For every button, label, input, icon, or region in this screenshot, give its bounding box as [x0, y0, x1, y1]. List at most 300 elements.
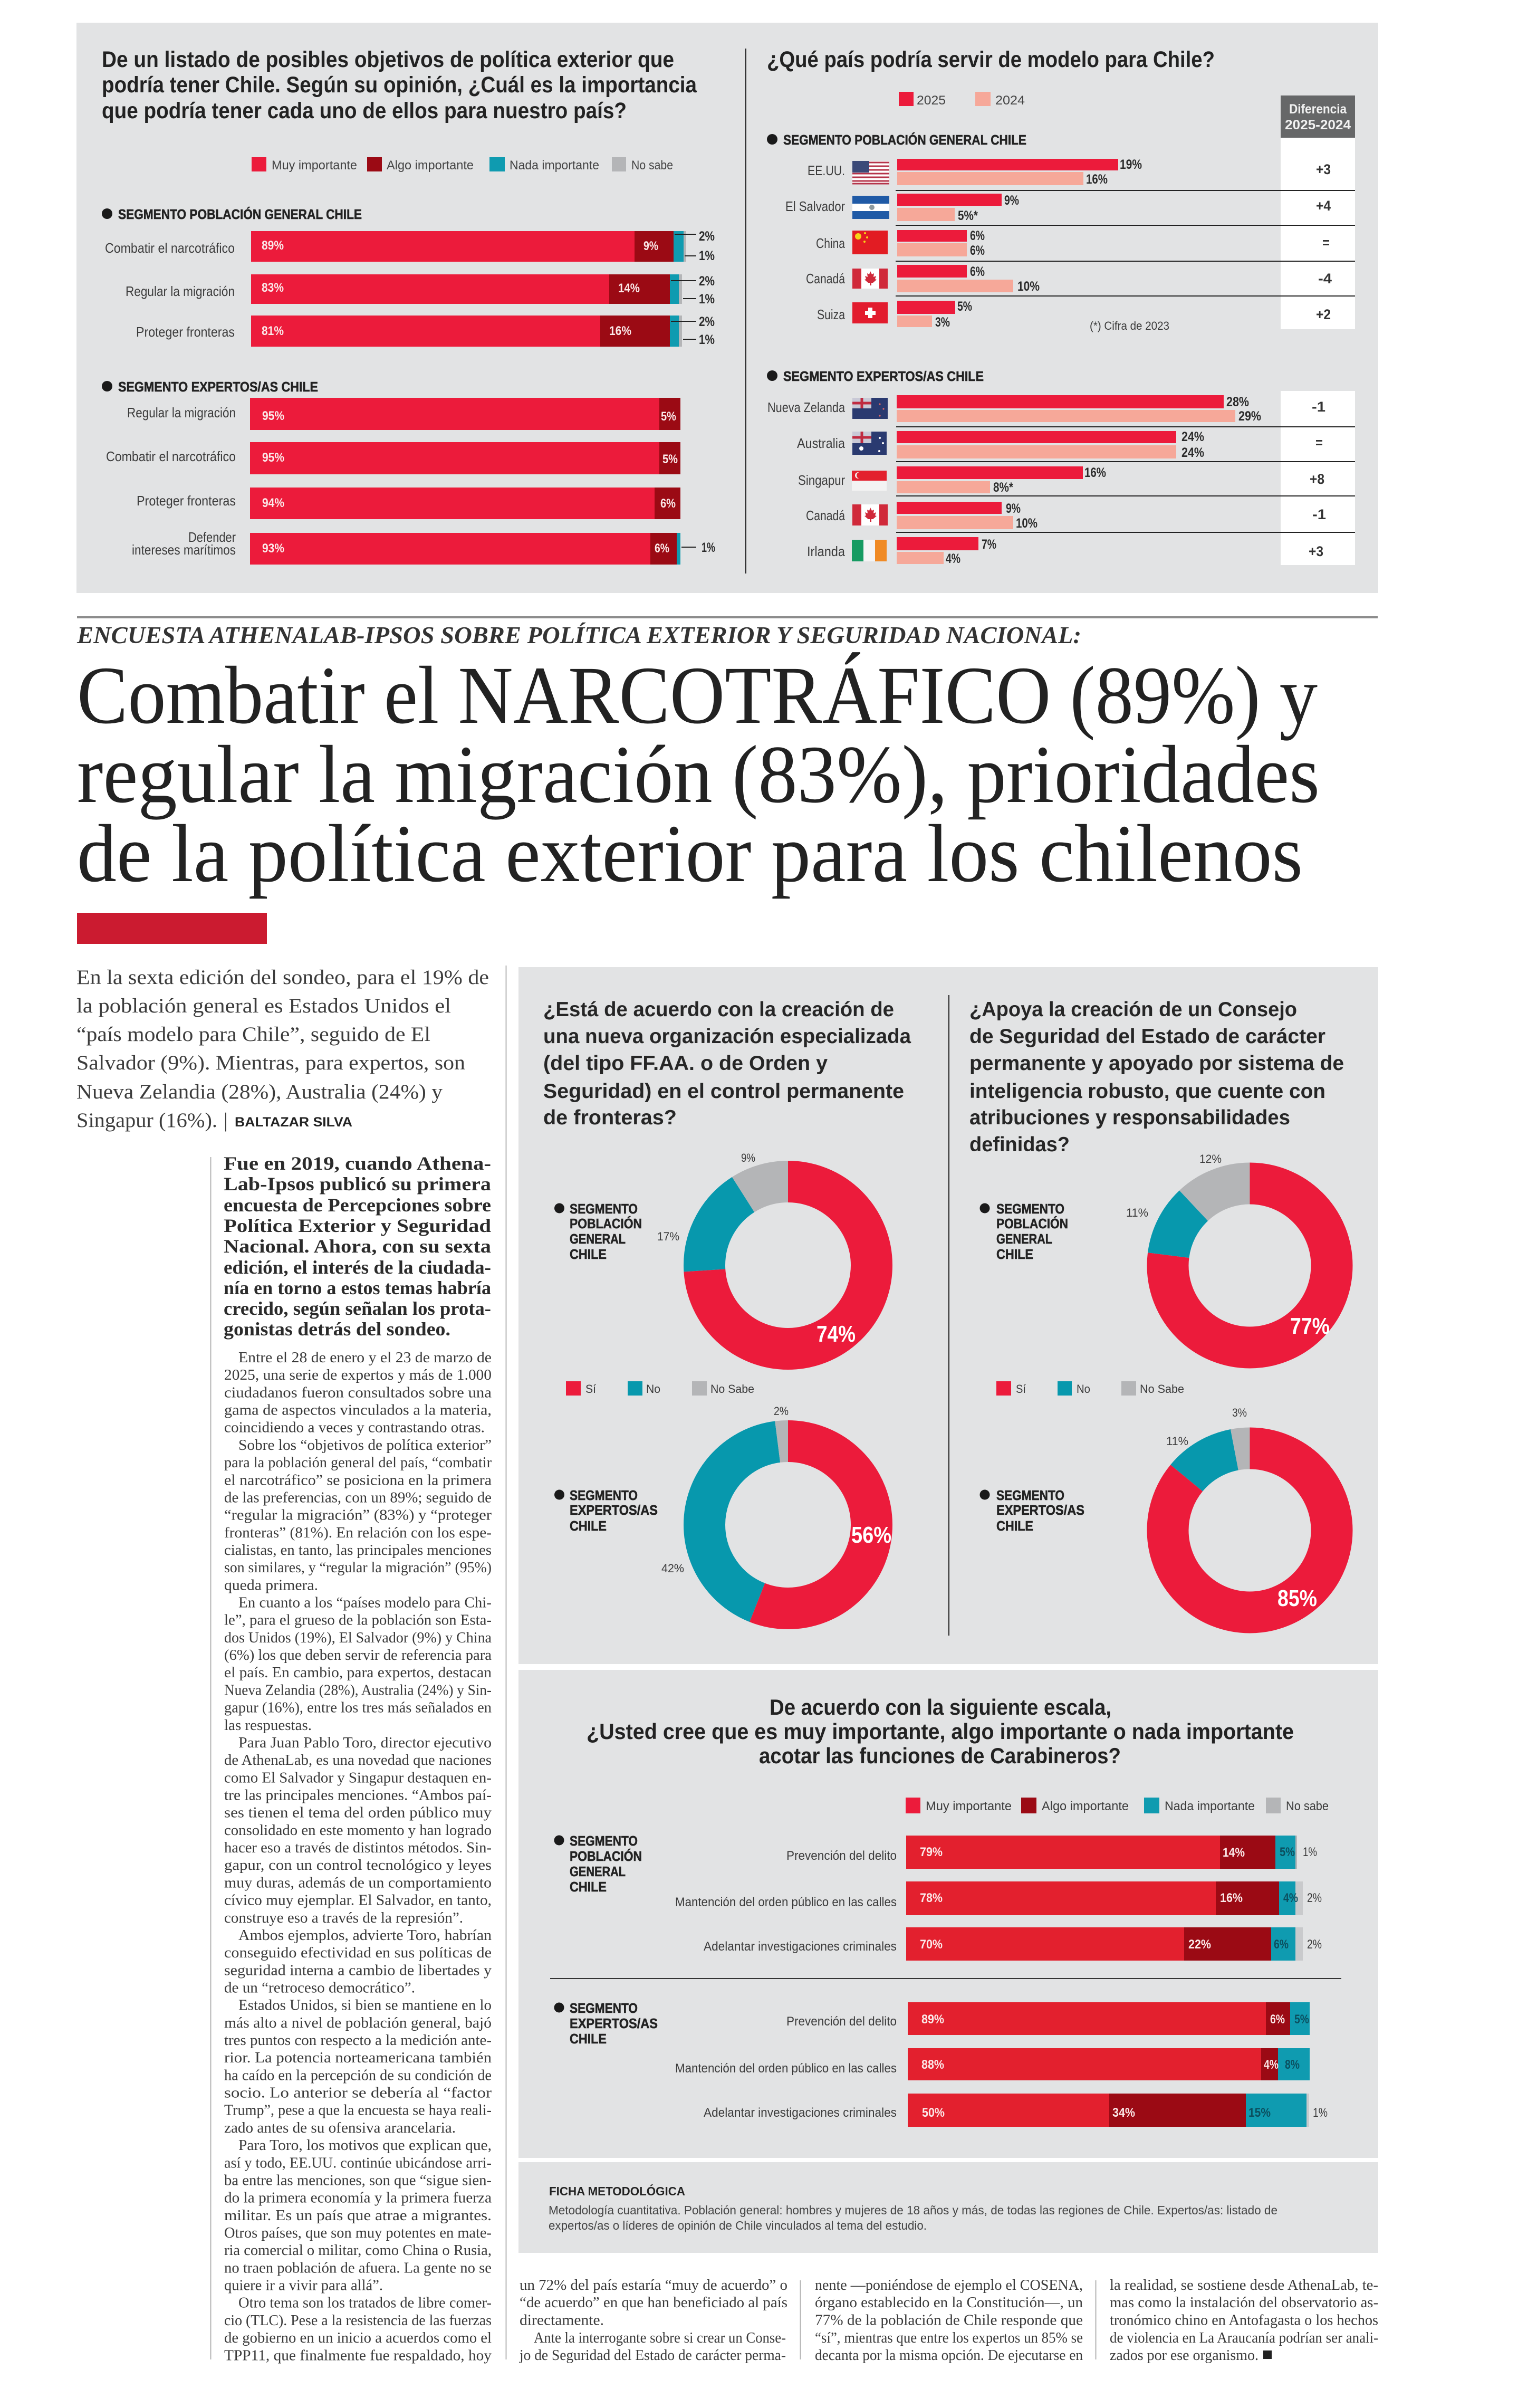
segment label: CHILE — [570, 1879, 607, 1895]
panel: funciones de Carabineros — [518, 1670, 1378, 2158]
bar: combatir el narcotráfico 89%: 2% — [699, 229, 715, 244]
segment label — [554, 1487, 658, 1534]
bar: mantención del orden público 88%: 88% — [921, 2058, 944, 2072]
donut: fronteras, población general: 17% — [657, 1230, 679, 1243]
red block — [77, 913, 267, 944]
segment label: GENERAL — [996, 1231, 1052, 1247]
article body column: fronteras” (81%). En relación con los espe- — [224, 1525, 492, 1541]
bar: adelantar investigaciones 70%: 70% — [920, 1937, 943, 1952]
row: China: 6% — [970, 228, 985, 243]
icon: flag Canada — [852, 269, 888, 289]
panel: donut charts — [518, 967, 1378, 1664]
article body column: el país. En cambio, para expertos, destacan — [224, 1665, 492, 1681]
article body column: dos Unidos (19%), El Salvador (9%) y China — [224, 1630, 492, 1646]
article body column: cialistas, en tanto, las principales menciones — [224, 1542, 492, 1559]
intro text: En la sexta edición del sondeo, para el 19% de — [76, 966, 489, 989]
article body column: consolidado en este momento y han logrado — [224, 1822, 492, 1839]
bar: regular la migración 83%: 83% — [262, 281, 284, 295]
row: El Salvador — [785, 193, 1331, 223]
row: Australia — [797, 429, 1323, 460]
lede paragraph: Fue en 2019, cuando Athena- — [224, 1153, 491, 1174]
bar: proteger fronteras 94%: Proteger fronteras — [137, 493, 236, 509]
legend: 2025 y 2024: 2025 — [917, 93, 946, 108]
article body column: Otros países, que son muy potentes en mate- — [224, 2225, 492, 2241]
row: EE.UU.: +3 — [1316, 161, 1331, 177]
row: Australia: 24% — [1181, 445, 1204, 460]
segment label: CHILE — [570, 1246, 607, 1262]
icon: flag USA — [852, 161, 889, 184]
donut: consejo, población general: 11% — [1126, 1206, 1148, 1219]
donut: fronteras, expertos: 42% — [661, 1562, 684, 1575]
bar: proteger fronteras 94%: 94% — [262, 496, 284, 510]
row: Singapur — [798, 465, 1324, 495]
row: Irlanda: 7% — [982, 537, 996, 552]
row: Suiza: 5% — [957, 299, 972, 314]
icon: flag Canada — [852, 504, 888, 525]
icon: flag Australia — [852, 432, 887, 455]
bar: adelantar investigaciones 70%: 6% — [1274, 1937, 1289, 1952]
row: China — [816, 228, 1330, 258]
bar: adelantar investigaciones 70% — [704, 1927, 1322, 1961]
bar: mantención del orden público 78%: 4% — [1283, 1891, 1298, 1905]
bar: regular la migración 83%: 2% — [699, 274, 715, 289]
row: Irlanda: +3 — [1309, 543, 1323, 559]
segment label — [980, 1201, 1068, 1262]
heading: consejo de seguridad: definidas? — [969, 1133, 1070, 1156]
lede paragraph: Lab-Ipsos publicó su primera — [224, 1173, 491, 1195]
article body column: TPP11, que finalmente fue respaldado, hoy — [224, 2347, 492, 2364]
row: Nueva Zelanda: 28% — [1226, 395, 1249, 409]
segment label: SEGMENTO — [570, 1833, 638, 1849]
row: Nueva Zelanda: 29% — [1238, 409, 1261, 424]
bar: prevención del delito 89%: 6% — [1270, 2012, 1285, 2027]
bar: adelantar investigaciones 50% — [704, 2094, 1328, 2127]
segment label: POBLACIÓN — [570, 1216, 642, 1231]
bar: proteger fronteras 81%: 81% — [262, 324, 284, 338]
bar: proteger fronteras 94% — [137, 488, 680, 519]
article body column: zado antes de su ofensiva arancelaria. — [224, 2120, 456, 2136]
segment label — [554, 1833, 642, 1895]
legend: importancia: No sabe — [631, 158, 673, 173]
headline: Combatir el NARCOTRÁFICO (89%) y — [77, 649, 1318, 741]
row: Canadá: Canadá — [806, 271, 845, 286]
row: Canadá: 6% — [970, 264, 985, 279]
segment label: SEGMENTO — [996, 1487, 1064, 1503]
legend: sí, no, no sabe: No — [646, 1382, 660, 1396]
article body column: Estados Unidos, si bien se mantiene en lo — [238, 1998, 492, 2014]
article body column: ses tienen el tema del orden público muy — [224, 1805, 492, 1821]
headline: de la política exterior para los chilenos — [77, 808, 1303, 899]
panel: ficha metodológica — [518, 2162, 1378, 2253]
legend: sí, no, no sabe: No Sabe — [710, 1382, 754, 1396]
bar: mantención del orden público 78%: Mantención del orden público en las calles — [675, 1895, 897, 1909]
article column 3: 77% de la población de Chile responde que — [815, 2312, 1083, 2329]
article body column: Trump”, pese a que la encuesta se haya reali- — [224, 2103, 492, 2119]
article body column: Para Toro, los motivos que explican que, — [238, 2137, 492, 2154]
article body column: do la primera economía y la primera fuerza — [224, 2190, 492, 2206]
article body column: quiere ir a vivir para allá”. — [224, 2277, 383, 2294]
headline — [77, 649, 1320, 899]
row: Suiza: 3% — [935, 315, 950, 330]
bar: proteger fronteras 81%: 1% — [699, 332, 715, 347]
heading: organización de fronteras: de fronteras? — [543, 1106, 677, 1129]
bar: defender intereses marítimos 93%: 6% — [655, 541, 669, 556]
row: Singapur: Singapur — [798, 472, 845, 488]
row: Canadá expertos: Canadá — [806, 508, 845, 523]
bar: combatir el narcotráfico 95% — [106, 442, 680, 474]
bar: combatir el narcotráfico 89%: 89% — [262, 238, 284, 253]
article body column: las respuestas. — [224, 1717, 312, 1734]
bar: defender intereses marítimos 93% — [132, 529, 715, 565]
row: Suiza: Suiza — [817, 307, 845, 322]
bar: adelantar investigaciones 50%: 1% — [1313, 2106, 1328, 2120]
segment label: población general: SEGMENTO POBLACIÓN GENERAL CHILE — [783, 132, 1026, 148]
article body column: Otro tema son los tratados de libre comer- — [238, 2295, 492, 2311]
article column 4: zados por ese organismo. — [1110, 2347, 1259, 2364]
article body column: de AthenaLab, es una novedad que naciones — [224, 1752, 492, 1769]
end mark — [1263, 2350, 1272, 2359]
article body column: ha caído en la percepción de su condición de — [224, 2067, 492, 2084]
lede paragraph: nía en torno a estos temas habría — [224, 1277, 491, 1298]
heading: consejo de seguridad: ¿Apoya la creación de un Consejo — [969, 998, 1297, 1021]
bar: adelantar investigaciones 70%: 2% — [1307, 1937, 1322, 1952]
row: Canadá expertos — [806, 501, 1326, 531]
intro text: la población general es Estados Unidos el — [76, 995, 451, 1017]
intro text: “país modelo para Chile”, seguido de El — [76, 1023, 430, 1046]
column header: diferencia — [1281, 95, 1355, 138]
article body column: militar. Es un país que atrae a migrantes. — [224, 2208, 492, 2224]
article body column: En cuanto a los “países modelo para Chi- — [238, 1594, 492, 1611]
heading: organización de fronteras: una nueva organización especializada — [543, 1025, 911, 1048]
legend: sí, no, no sabe: Sí — [585, 1382, 596, 1396]
bar: prevención del delito 79%: 79% — [920, 1845, 943, 1859]
row: Canadá expertos: 10% — [1016, 516, 1038, 531]
row: El Salvador: El Salvador — [785, 198, 845, 214]
heading: objetivos de política exterior — [102, 47, 697, 123]
bar: combatir el narcotráfico 89% — [105, 229, 715, 263]
bar: mantención del orden público 88%: 4% — [1264, 2058, 1279, 2072]
donut: fronteras, expertos — [554, 1404, 891, 1608]
row: Canadá expertos: 9% — [1006, 501, 1021, 516]
segment label: CHILE — [570, 1518, 607, 1534]
bar: regular la migración 95% — [127, 398, 680, 430]
icon: flag China — [852, 231, 888, 254]
article body column: de gobierno en un inicio a acuerdos como el — [224, 2330, 492, 2346]
icon: flag Ireland — [852, 540, 887, 561]
chart: carabineros, expertos — [554, 2000, 1328, 2127]
bar: prevención del delito 79%: Prevención del delito — [786, 1849, 897, 1863]
segment label: EXPERTOS/AS — [570, 1502, 658, 1518]
lede paragraph: gonistas detrás del sondeo. — [224, 1318, 450, 1340]
bar: regular la migración 95%: Regular la migración — [127, 405, 236, 421]
donut: consejo, población general: 12% — [1199, 1152, 1222, 1165]
bar: combatir el narcotráfico 95%: Combatir el narcotráfico — [106, 448, 236, 464]
heading: consejo de seguridad: inteligencia robusto, que cuente con — [969, 1080, 1325, 1103]
row: Irlanda — [807, 537, 1323, 566]
bar: combatir el narcotráfico 89%: Combatir el narcotráfico — [105, 240, 235, 256]
row: Singapur: +8 — [1310, 471, 1324, 487]
bar: mantención del orden público 78%: 78% — [920, 1891, 943, 1905]
heading: organización de fronteras: (del tipo FF.AA. o de Orden y — [543, 1052, 828, 1075]
heading: organización de fronteras — [543, 998, 911, 1129]
segment label: POBLACIÓN — [570, 1848, 642, 1864]
donut: consejo, expertos — [980, 1406, 1332, 1612]
row: Singapur: 8%* — [993, 480, 1013, 495]
article body column: el narcotráfico” se posiciona en la primera — [224, 1472, 492, 1488]
legend: 2025 y 2024 — [899, 92, 1025, 108]
bar: proteger fronteras 81%: 16% — [609, 324, 631, 338]
heading: objetivos de política exterior: De un listado de posibles objetivos de política exterior que — [102, 47, 674, 72]
bar: adelantar investigaciones 70%: Adelantar investigaciones criminales — [704, 1939, 897, 1954]
bar: prevención del delito 89%: 89% — [921, 2012, 944, 2027]
article body column: gapur, con un control tecnológico y leyes — [224, 1857, 492, 1874]
segment label — [554, 1201, 642, 1262]
row: Nueva Zelanda: -1 — [1312, 399, 1325, 415]
segment label — [980, 1487, 1084, 1534]
ficha heading: FICHA METODOLÓGICA — [549, 2184, 685, 2198]
bar: adelantar investigaciones 70%: 22% — [1188, 1937, 1211, 1952]
bar: mantención del orden público 88% — [675, 2048, 1310, 2080]
icon: flag Switzerland — [852, 302, 888, 323]
ficha text: Metodología cuantitativa. Población general: hombres y mujeres de 18 años y más, de todas las regiones de Chile. Expertos/as: listado de — [549, 2203, 1277, 2217]
row: Suiza — [817, 299, 1331, 330]
row: China: 6% — [970, 243, 985, 258]
article body column: construye eso a través de la represión”. — [224, 1910, 463, 1926]
legend: importancia — [906, 1798, 1329, 1813]
article body column: (6%) los que deben servir de referencia para — [224, 1647, 492, 1664]
article body column: seguridad interna a cambio de libertades y — [224, 1962, 492, 1979]
row: El Salvador: +4 — [1316, 198, 1331, 214]
bar: proteger fronteras 81% — [136, 314, 715, 347]
article body column: conseguido efectividad en sus políticas de — [224, 1945, 492, 1961]
row: Nueva Zelanda — [767, 395, 1325, 424]
byline: BALTAZAR SILVA — [235, 1115, 352, 1130]
article column 4: la realidad, se sostiene desde AthenaLab, te- — [1110, 2277, 1378, 2294]
article body column: hacer eso a través de distintos métodos. Sin- — [224, 1840, 492, 1856]
bar: adelantar investigaciones 50%: Adelantar investigaciones criminales — [704, 2106, 897, 2120]
donut: fronteras, expertos: 56% — [851, 1522, 891, 1548]
bar: proteger fronteras 81%: 2% — [699, 314, 715, 329]
row: Canadá: -4 — [1318, 271, 1332, 286]
row: EE.UU. — [808, 157, 1331, 187]
bar: regular la migración 95%: 95% — [262, 409, 284, 423]
segment label: SEGMENTO — [570, 1487, 638, 1503]
divider between donut charts — [948, 995, 949, 1636]
intro text: Nueva Zelandia (28%), Australia (24%) y — [76, 1081, 443, 1103]
segment label: SEGMENTO — [996, 1201, 1064, 1217]
article column 3: órgano establecido en la Constitución—, un — [815, 2295, 1083, 2311]
row: Australia: 24% — [1181, 429, 1204, 444]
donut: consejo, expertos: 85% — [1277, 1585, 1317, 1611]
article column 2: Ante la interrogante sobre si crear un Conse- — [534, 2330, 786, 2346]
row: Australia: Australia — [797, 435, 845, 451]
bar: mantención del orden público 78%: 2% — [1307, 1891, 1322, 1905]
divider rule above kicker — [77, 616, 1378, 618]
donut: fronteras, expertos: 2% — [774, 1404, 789, 1418]
donut: consejo, población general — [980, 1152, 1332, 1348]
article body column: cívico muy ejemplar. El Salvador, en tanto, — [224, 1893, 492, 1909]
article body column: gama de aspectos vinculados a la materia, — [224, 1402, 492, 1418]
donut: consejo, población general: 77% — [1290, 1313, 1330, 1339]
legend: importancia — [252, 157, 673, 173]
ficha text — [549, 2203, 1277, 2232]
heading: objetivos de política exterior: que podría tener cada uno de ellos para nuestro país? — [102, 98, 627, 123]
chart: carabineros, población general — [554, 1833, 1322, 1961]
bar: proteger fronteras 94%: 6% — [660, 496, 676, 511]
heading: carabineros — [587, 1695, 1294, 1768]
row: Irlanda: Irlanda — [807, 543, 845, 559]
bar: defender intereses marítimos 93%: 1% — [702, 540, 715, 555]
lede paragraph: Política Exterior y Seguridad — [224, 1215, 491, 1236]
bar: defender intereses marítimos 93%: intereses marítimos — [132, 542, 236, 558]
heading: carabineros: De acuerdo con la siguiente escala, — [770, 1695, 1111, 1719]
row: EE.UU.: EE.UU. — [808, 163, 845, 178]
article body column: ria comercial o militar, como China o Rusia, — [224, 2242, 492, 2259]
donut: fronteras, población general: 9% — [741, 1151, 755, 1164]
article body column: no traen población de afuera. La gente no se — [224, 2260, 492, 2276]
article body column: Para Juan Pablo Toro, director ejecutivo — [238, 1735, 492, 1751]
article body column: socio. Lo anterior se debería al “factor — [224, 2085, 492, 2101]
bar: regular la migración 83% — [126, 274, 715, 307]
row: China: China — [816, 235, 845, 251]
bar: adelantar investigaciones 50%: 34% — [1112, 2106, 1135, 2120]
heading: consejo de seguridad: de Seguridad del Estado de carácter — [969, 1025, 1325, 1048]
row: Nueva Zelanda: Nueva Zelanda — [767, 399, 845, 415]
segment label: CHILE — [996, 1518, 1033, 1534]
segment label: POBLACIÓN — [996, 1216, 1068, 1231]
bar: combatir el narcotráfico 95%: 5% — [662, 452, 678, 466]
segment label: GENERAL — [570, 1864, 626, 1879]
heading: organización de fronteras: ¿Está de acuerdo con la creación de — [543, 998, 894, 1021]
bar: regular la migración 95%: 5% — [661, 409, 676, 424]
column header: diferencia: Diferencia — [1289, 102, 1347, 117]
legend: sí, no, no sabe — [566, 1381, 754, 1396]
segment label: CHILE — [570, 2031, 607, 2047]
legend: sí, no, no sabe: No Sabe — [1140, 1382, 1184, 1396]
legend: importancia: Nada importante — [510, 158, 599, 173]
icon: flag New Zealand — [852, 398, 888, 419]
article body column: Sobre los “objetivos de política exterior” — [238, 1437, 492, 1454]
bar: prevención del delito 79%: 1% — [1303, 1845, 1317, 1859]
article body column: Nueva Zelandia (28%), Australia (24%) y Sin- — [224, 1682, 492, 1698]
chart: países modelo, población general — [767, 132, 1355, 332]
legend: sí, no, no sabe: No — [1077, 1382, 1090, 1396]
intro text: | — [224, 1109, 228, 1132]
panel: top charts — [76, 23, 1378, 593]
row: China: = — [1322, 235, 1330, 251]
article body column: para la población general del país, “combatir — [224, 1455, 492, 1471]
article body column: 2025, una serie de expertos y más de 1.000 — [224, 1367, 492, 1383]
legend: 2025 y 2024: 2024 — [995, 93, 1025, 108]
article body column: coincidiendo a veces y contrastando otras. — [224, 1420, 485, 1436]
chart: países modelo, expertos — [767, 368, 1355, 566]
article column 2: un 72% del país estaría “muy de acuerdo” o — [520, 2277, 787, 2294]
heading: organización de fronteras: Seguridad) en el control permanente — [543, 1080, 904, 1103]
segment label: expertos: SEGMENTO EXPERTOS/AS CHILE — [783, 368, 984, 384]
article column 3: decanta por la misma opción. De ejecutarse en — [815, 2347, 1083, 2364]
bar: prevención del delito 79%: 14% — [1223, 1846, 1245, 1860]
legend: importancia: Nada importante — [1165, 1799, 1255, 1813]
donut: consejo, expertos: 3% — [1232, 1406, 1247, 1419]
article body column: tre las principales menciones. “Ambos paí- — [224, 1788, 492, 1803]
bar: combatir el narcotráfico 95%: 95% — [262, 451, 284, 465]
article column 2: “de acuerdo” en que han beneficiado al país — [520, 2295, 787, 2311]
footnote: cifra de 2023: (*) Cifra de 2023 — [1090, 319, 1169, 332]
article body column: le”, para el grueso de la población son Esta- — [224, 1612, 492, 1629]
donut: fronteras, población general — [554, 1151, 871, 1349]
bar: regular la migración 83%: 1% — [699, 292, 715, 307]
icon: flag Singapore — [852, 471, 887, 491]
bar: prevención del delito 79%: 5% — [1280, 1845, 1295, 1859]
article column 2 — [519, 2277, 787, 2364]
segment label: CHILE — [996, 1246, 1033, 1262]
bar: mantención del orden público 88%: Mantención del orden público en las calles — [675, 2061, 897, 2076]
kicker: ENCUESTA ATHENALAB-IPSOS SOBRE POLÍTICA EXTERIOR Y SEGURIDAD NACIONAL: — [76, 622, 1081, 648]
bar: prevención del delito 89% — [786, 2002, 1310, 2035]
article column 4 — [1110, 2277, 1378, 2364]
chart: objetivos, población general — [102, 206, 715, 347]
bar: combatir el narcotráfico 89%: 9% — [643, 239, 658, 253]
row: Canadá — [806, 264, 1332, 294]
lede paragraph: encuesta de Percepciones sobre — [224, 1195, 491, 1216]
bar: regular la migración 83%: 14% — [618, 281, 640, 295]
article body column: Entre el 28 de enero y el 23 de marzo de — [238, 1350, 492, 1366]
legend: sí, no, no sabe: Sí — [1016, 1382, 1026, 1396]
bar: mantención del orden público 78% — [675, 1881, 1322, 1915]
article body column: rior. La potencia norteamericana también — [224, 2050, 492, 2066]
article body column: de las preferencias, con un 89%; seguido de — [224, 1489, 492, 1506]
row: Australia: = — [1315, 435, 1323, 451]
article body column — [224, 1350, 492, 2364]
article column 2: directamente. — [520, 2312, 604, 2329]
intro text — [76, 966, 489, 1132]
article column 4: mas como la instalación del observatorio as- — [1110, 2295, 1378, 2311]
column rules — [211, 966, 506, 2359]
lede paragraph: crecido, según señalan los prota- — [224, 1298, 491, 1319]
bar: prevención del delito 79% — [786, 1836, 1317, 1869]
row: Suiza: +2 — [1316, 307, 1331, 322]
bar: mantención del orden público 88%: 8% — [1285, 2058, 1300, 2072]
icon: flag El Salvador — [852, 196, 889, 219]
heading: consejo de seguridad: permanente y apoyado por sistema de — [969, 1052, 1344, 1075]
article body column: de un “retroceso democrático”. — [224, 1980, 415, 1996]
article body column: ciudadanos fueron consultados sobre una — [224, 1384, 492, 1401]
segment label: EXPERTOS/AS — [996, 1502, 1084, 1518]
legend: importancia: Muy importante — [272, 158, 357, 173]
article body column: ba entre las menciones, son que “sigue sien- — [224, 2173, 492, 2189]
row: Irlanda: 4% — [946, 551, 960, 566]
bar: combatir el narcotráfico 89%: 1% — [699, 249, 715, 263]
heading: carabineros: acotar las funciones de Carabineros? — [759, 1743, 1121, 1768]
legend: sí, no, no sabe — [996, 1381, 1184, 1396]
column header: diferencia: 2025-2024 — [1285, 118, 1351, 132]
article body column: como El Salvador y Singapur destaquen en- — [224, 1770, 492, 1786]
row: El Salvador: 5%* — [958, 208, 978, 223]
article column 3: “sí”, mientras que entre los expertos un 85% se — [815, 2330, 1083, 2346]
bar: mantención del orden público 78%: 16% — [1220, 1891, 1243, 1905]
heading: objetivos de política exterior: podría tener Chile. Según su opinión, ¿Cuál es la importancia — [102, 72, 697, 98]
article body column: cio (TLC). Pese a la resistencia de las fuerzas — [224, 2313, 492, 2329]
donut: fronteras, población general: 74% — [816, 1321, 856, 1347]
donut: consejo, expertos: 11% — [1166, 1435, 1188, 1448]
segment label: SEGMENTO — [570, 2000, 638, 2016]
article column 4: tronómico chino en Antofagasta o los hechos — [1110, 2312, 1378, 2329]
lede paragraph: Nacional. Ahora, con su sexta — [224, 1236, 491, 1257]
segment label: EXPERTOS/AS — [570, 2015, 658, 2031]
headline: regular la migración (83%), prioridades — [77, 729, 1320, 820]
bar: defender intereses marítimos 93%: 93% — [262, 541, 284, 556]
intro text: Salvador (9%). Mientras, para expertos, son — [76, 1052, 465, 1074]
